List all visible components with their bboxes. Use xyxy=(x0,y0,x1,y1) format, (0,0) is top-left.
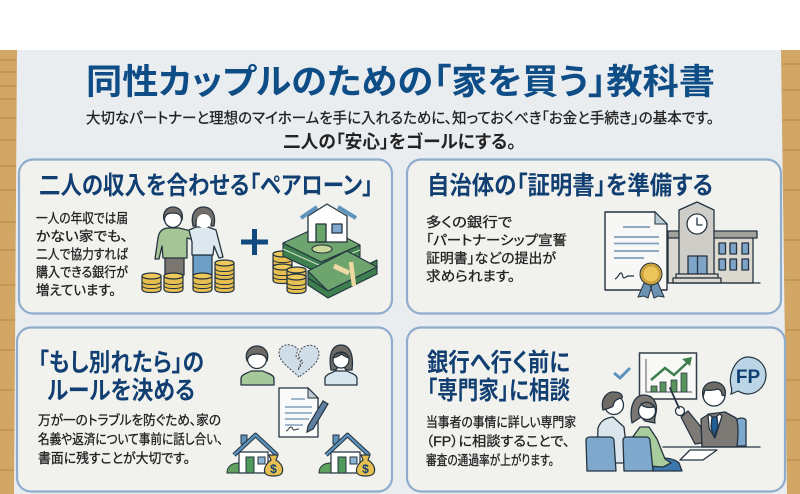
body text: pair loan: かない家でも、 xyxy=(36,229,128,244)
icon: couple xyxy=(155,207,223,275)
body text: rules xyxy=(38,412,223,466)
icon: woman xyxy=(325,345,357,385)
body text: pair loan: 増えています。 xyxy=(36,283,116,298)
icon: coin stacks xyxy=(142,260,234,292)
icon: advisor xyxy=(663,382,760,460)
icon: city hall xyxy=(668,202,760,283)
body text: certificate: 「パートナーシップ宣誓 xyxy=(426,233,567,248)
icon: chart board xyxy=(640,353,696,399)
subtitle: 大切なパートナーと理想のマイホームを手に入れるために、知っておくべき「お金と手続き」の基本です。 xyxy=(86,110,714,127)
heading: rules: ルールを決める xyxy=(47,377,195,405)
icon: certificate document xyxy=(605,212,667,298)
icon: document and pen xyxy=(279,388,328,437)
body text: rules: 書面に残すことが大切です。 xyxy=(38,451,190,466)
heading: pair loan: 二人の収入を合わせる「ペアローン」 xyxy=(39,172,373,200)
lower money stack xyxy=(308,251,377,298)
body text: FP: 当事者の事情に詳しい専門家 xyxy=(426,415,576,430)
body text: pair loan: 二人で協力すれば xyxy=(36,247,129,262)
icon: man xyxy=(241,346,274,385)
icon: check mark xyxy=(614,368,630,378)
body text: certificate xyxy=(426,215,567,284)
icon: house with money left xyxy=(227,435,283,476)
icon: house with money right xyxy=(319,435,375,476)
body text: pair loan: 一人の年収では届 xyxy=(36,211,128,226)
icon: plus xyxy=(241,229,268,255)
upper money stack xyxy=(283,225,360,274)
heading: certificate: 自治体の「証明書」を準備する xyxy=(427,172,713,200)
body text: FP xyxy=(426,415,576,468)
heading: rules xyxy=(38,349,204,405)
heading: FP: 「専門家」に相談 xyxy=(427,377,570,405)
body text: FP: 審査の通過率が上がります。 xyxy=(426,453,554,468)
icon: broken heart xyxy=(279,345,319,377)
subtitle emphasis: 二人の「安心」をゴールにする。 xyxy=(283,131,516,152)
panel: FP xyxy=(407,328,785,492)
body text: rules: 万が一のトラブルを防ぐため、家の xyxy=(38,412,221,428)
heading: rules: 「もし別れたら」の xyxy=(38,349,204,377)
icon: FP speech bubble xyxy=(730,357,766,394)
heading: FP xyxy=(427,349,570,405)
icon: FP speech bubble: FP xyxy=(736,367,760,388)
icon: house on money xyxy=(273,204,377,298)
body text: FP: （FP）に相談することで、 xyxy=(426,434,570,449)
body text: certificate: 多くの銀行で xyxy=(426,215,512,230)
heading: FP: 銀行へ行く前に xyxy=(427,349,570,377)
body text: pair loan: 購入できる銀行が xyxy=(36,265,129,280)
panel: certificate xyxy=(407,160,781,314)
panel: rules xyxy=(17,328,392,492)
body text: rules: 名義や返済について事前に話し合い、 xyxy=(38,431,223,447)
icon: couple at desk xyxy=(586,392,682,471)
panel: pair loan xyxy=(19,160,392,314)
body text: pair loan xyxy=(36,211,129,298)
body text: certificate: 求められます。 xyxy=(426,269,515,284)
body text: certificate: 証明書」などの提出が xyxy=(426,251,557,266)
title: 同性カップルのための「家を買う」教科書 xyxy=(86,63,715,102)
